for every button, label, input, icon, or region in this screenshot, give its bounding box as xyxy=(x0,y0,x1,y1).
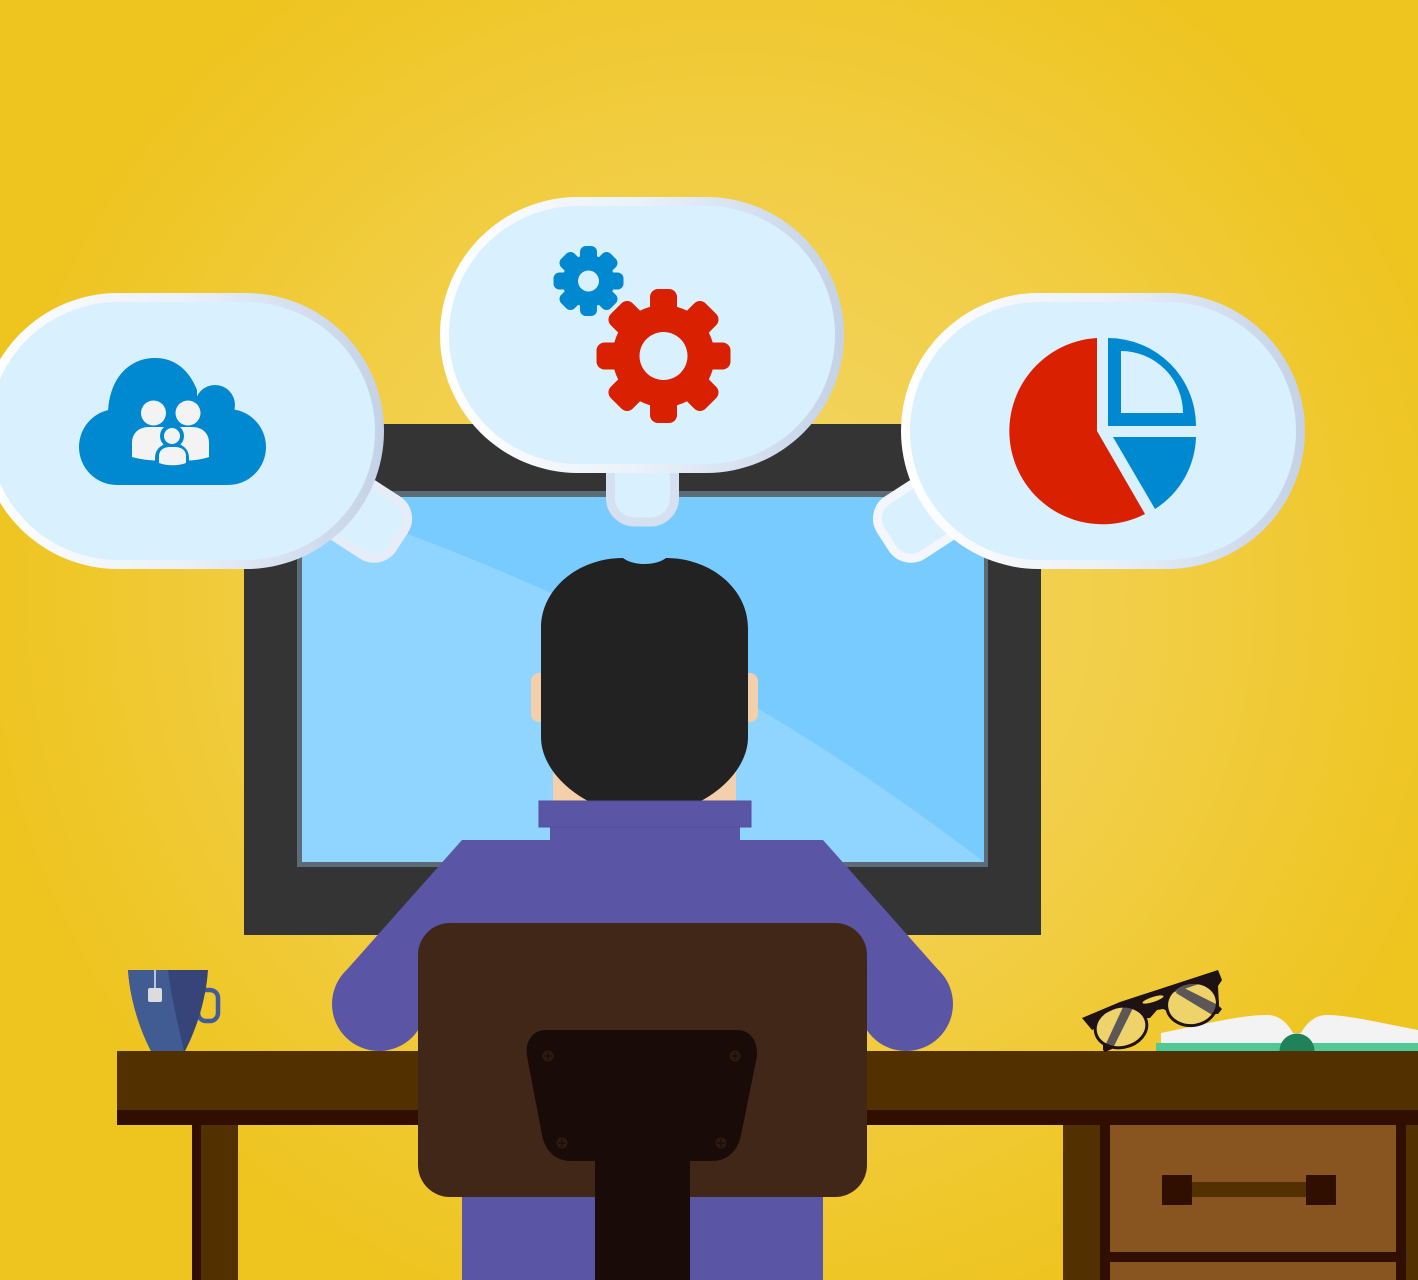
right lens rim xyxy=(1163,978,1221,1030)
monitor xyxy=(244,424,1041,935)
ears xyxy=(531,673,758,722)
icon: family in cloud xyxy=(79,358,266,485)
neck xyxy=(553,740,736,805)
open book xyxy=(1156,1015,1418,1051)
glasses frame xyxy=(1082,970,1222,1030)
speech bubble tail: left xyxy=(310,466,416,567)
bridge gap xyxy=(1142,994,1164,1005)
desk drawers xyxy=(1063,1125,1418,1280)
desk xyxy=(117,1051,1418,1280)
collar xyxy=(539,801,751,827)
glasses foot xyxy=(1103,1043,1112,1052)
icon: pie chart xyxy=(1009,338,1196,524)
speech bubble: left xyxy=(0,293,384,569)
icon: small blue gear xyxy=(554,246,624,316)
sweater body and arms xyxy=(332,827,953,1280)
hair xyxy=(541,558,748,803)
person xyxy=(332,558,953,1280)
left lens rim xyxy=(1091,1002,1151,1052)
left lens xyxy=(1096,1008,1146,1046)
icon: large red gear xyxy=(596,289,730,423)
mug xyxy=(128,970,218,1051)
speech bubble: right xyxy=(901,293,1305,569)
desk left leg xyxy=(192,1125,238,1280)
right lens xyxy=(1168,984,1216,1024)
chair xyxy=(418,923,867,1280)
speech bubble tail: right xyxy=(869,466,975,567)
speech bubble tail: centre xyxy=(610,440,674,522)
glasses xyxy=(1082,970,1225,1055)
speech bubble: centre xyxy=(440,197,844,473)
chair screws xyxy=(542,1050,740,1148)
